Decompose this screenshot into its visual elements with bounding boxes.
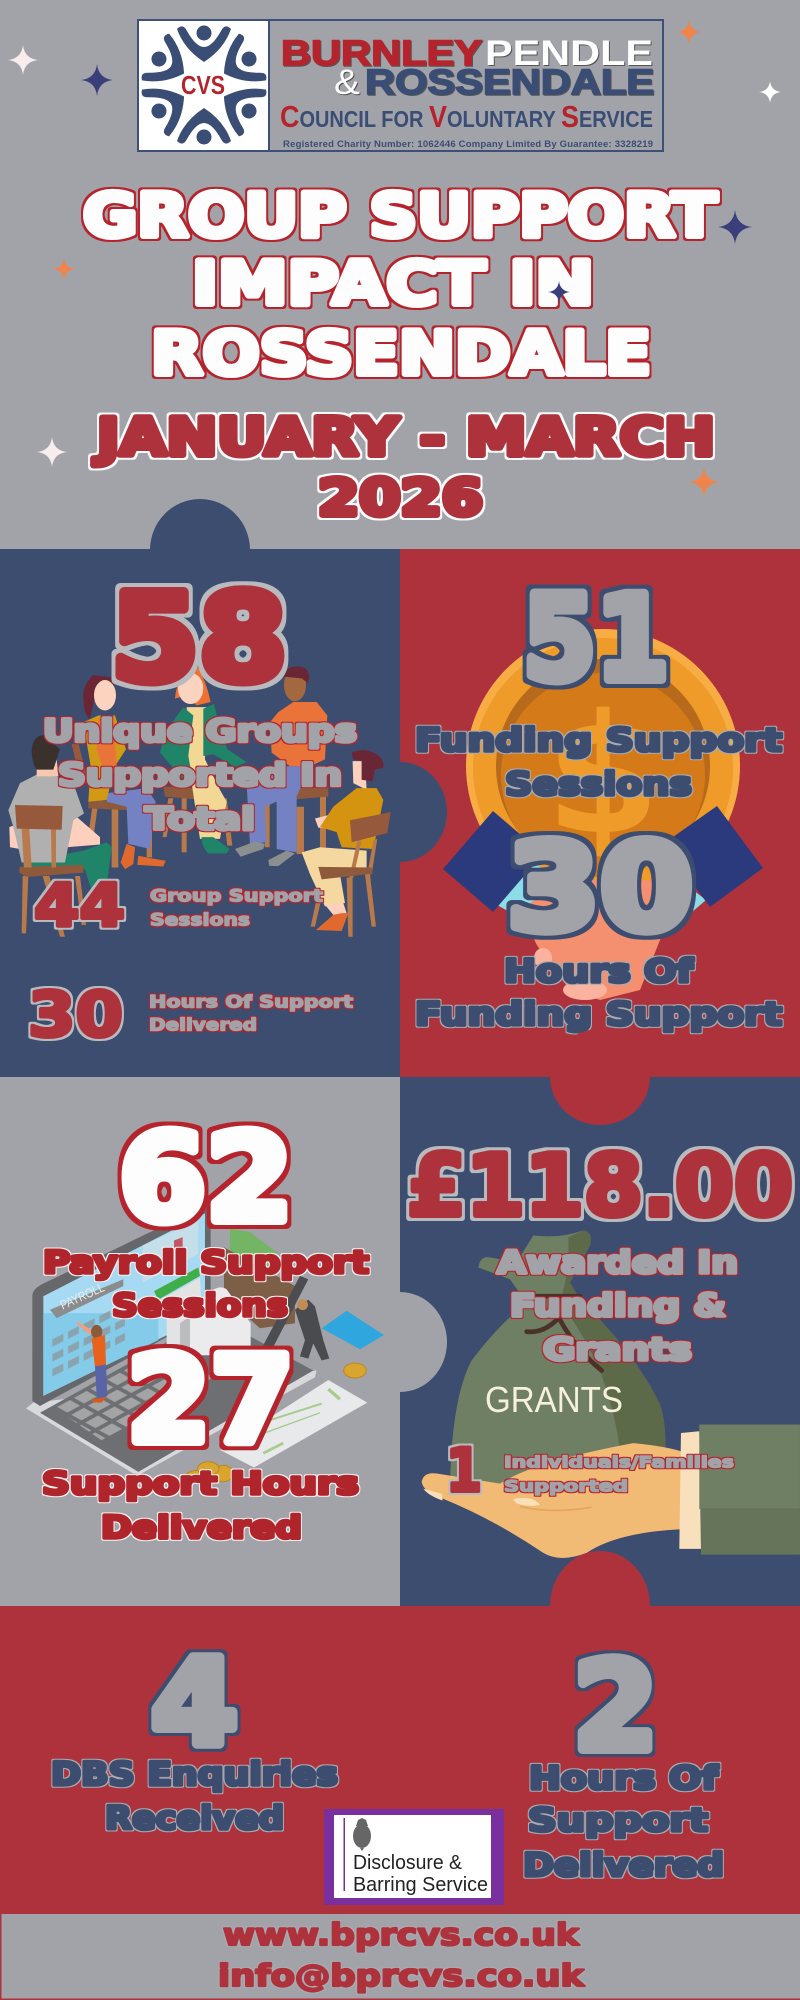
gold coins <box>187 1363 366 1482</box>
panel: group support <box>0 499 400 1077</box>
logo wordmark: BURNLEY <box>281 34 482 73</box>
label: unique groups supported in total <box>43 714 357 838</box>
panel background navy <box>0 549 400 1077</box>
stat: 1 individuals families supported: Individuals/Families <box>504 1452 734 1472</box>
puzzle tab top <box>150 499 250 601</box>
date heading: JANUARY - MARCH <box>94 408 715 468</box>
website address: www.bprcvs.co.uk <box>223 1918 580 1953</box>
logo frame <box>138 20 663 151</box>
laptop keys <box>52 1350 213 1441</box>
stat: 1 individuals families supported: Supported <box>504 1476 628 1496</box>
panel: funding and grants awarded <box>400 1029 800 1606</box>
label: awarded in funding and grants: Awarded In <box>497 1245 738 1281</box>
big number 30: 30 <box>507 819 693 958</box>
stat: 1 individuals families supported: 1 <box>446 1436 482 1506</box>
big number 62: 62 <box>119 1110 293 1249</box>
label: funding support sessions: Sessions <box>505 765 692 803</box>
stat: 44 group support sessions: Group Support <box>150 886 323 906</box>
Disclosure and Barring Service logo: Disclosure & <box>353 1852 463 1874</box>
label: hours of support delivered: Support <box>528 1801 708 1839</box>
footer contact strip <box>0 1913 800 2000</box>
jacket sleeve <box>699 1425 800 1555</box>
cheque <box>220 1380 367 1467</box>
icon: gold coin: $ <box>546 679 660 871</box>
big number 58: 58 <box>111 570 287 709</box>
person: man from behind in grey shirt <box>8 735 112 937</box>
label: DBS enquiries received: Received <box>105 1799 284 1837</box>
label: hours of funding support <box>415 952 782 1033</box>
label: DBS enquiries received: DBS Enquiries <box>51 1755 338 1793</box>
label: awarded in funding and grants: Grants <box>543 1332 692 1368</box>
logo wordmark: & <box>334 63 360 102</box>
label: unique groups supported in total: Total <box>145 802 255 838</box>
amount: £118.00: £118.00 <box>407 1137 793 1236</box>
date heading <box>94 408 715 527</box>
logo wordmark: COUNCIL FOR VOLUNTARY SERVICE <box>280 99 653 134</box>
label: support hours delivered: Delivered <box>101 1510 302 1546</box>
icon: gold coin <box>466 629 740 903</box>
main title <box>83 181 717 389</box>
icon: shaking hands <box>443 806 763 1000</box>
panel: funding support <box>400 549 800 1077</box>
panel background red <box>0 1606 800 1913</box>
logo white square with people emblem <box>139 20 269 151</box>
panel background red <box>400 549 800 1077</box>
puzzle tab from group panel <box>400 762 447 862</box>
stat: 30 hours of support delivered <box>28 978 353 1051</box>
receipts, binder and wallet <box>154 1229 295 1355</box>
decorative sparkle stars <box>8 20 781 497</box>
credit card <box>322 1311 384 1349</box>
person: man with orange hoodie <box>235 666 328 866</box>
label: DBS enquiries received <box>51 1755 338 1837</box>
big number 27: 27 <box>127 1332 294 1470</box>
stat: 44 group support sessions <box>34 871 323 940</box>
label: hours of funding support: Hours Of <box>504 952 694 990</box>
person: woman with mustard cardigan <box>72 675 166 869</box>
laptop base plate and deck <box>26 1316 317 1474</box>
email address: info@bprcvs.co.uk <box>218 1959 585 1994</box>
label: funding support sessions <box>415 721 782 803</box>
stat: 44 group support sessions: 44 <box>34 871 125 940</box>
stat: 44 group support sessions: Sessions <box>150 910 250 930</box>
Disclosure and Barring Service logo <box>324 1809 504 1905</box>
logo wordmark <box>280 34 654 150</box>
person: woman from behind in yellow sweater <box>302 750 391 937</box>
illustration: people seated in a circle <box>8 665 391 937</box>
laptop screen <box>32 1205 211 1406</box>
small businessman pushing lever <box>263 1276 329 1360</box>
puzzle tab into grants panel <box>550 1551 650 1661</box>
puzzle tab from payroll panel <box>400 1292 447 1392</box>
label: awarded in funding and grants: Funding & <box>510 1288 726 1324</box>
label: support hours delivered <box>42 1466 359 1546</box>
label: hours of support delivered: Hours Of <box>529 1759 719 1797</box>
panel background navy <box>400 1077 800 1606</box>
label: unique groups supported in total: Unique Groups <box>43 714 357 750</box>
person: woman with green jacket <box>160 665 247 853</box>
stat: 30 hours of support delivered: 30 <box>28 978 123 1051</box>
stat: 30 hours of support delivered: Delivered <box>149 1016 257 1036</box>
label: support hours delivered: Support Hours <box>42 1466 359 1502</box>
main title: ROSSENDALE <box>151 319 651 389</box>
header logo <box>138 20 663 151</box>
logo wordmark: PENDLE <box>485 34 653 73</box>
shirt cuff <box>679 1431 701 1549</box>
logo wordmark: Registered Charity Number: 1062446 Company Limited By Guarantee: 3328219 <box>283 139 653 150</box>
main title: GROUP SUPPORT <box>83 181 717 251</box>
label: hours of support delivered <box>523 1759 724 1884</box>
puzzle tab from funding panel <box>550 1029 650 1125</box>
icon: money bag <box>450 1230 665 1499</box>
label: payroll support sessions: Sessions <box>112 1288 288 1324</box>
label: hours of support delivered: Delivered <box>523 1846 724 1884</box>
label: unique groups supported in total: Supported In <box>58 758 342 794</box>
small person pointing at screen <box>77 1322 107 1403</box>
laptop screen: PAYROLL <box>58 1279 107 1312</box>
panel: DBS enquiries <box>0 1551 800 1913</box>
bag label GRANTS: GRANTS <box>485 1379 623 1420</box>
Disclosure and Barring Service logo: Barring Service <box>353 1874 488 1896</box>
main title: IMPACT IN <box>192 249 594 319</box>
panel background grey <box>0 1077 400 1606</box>
stat: 30 hours of support delivered: Hours Of Support <box>149 992 353 1012</box>
illustration: grants bag on hand <box>422 1230 800 1558</box>
label: payroll support sessions: Payroll Support <box>43 1245 369 1281</box>
stat: 1 individuals families supported <box>446 1436 734 1506</box>
icon: royal crest <box>353 1818 371 1851</box>
hand holding the bag <box>422 1443 682 1558</box>
big number 51: 51 <box>523 570 669 707</box>
logo white square with people emblem: CVS <box>181 70 225 100</box>
panel: payroll support <box>0 1077 400 1606</box>
illustration: isometric laptop payroll <box>26 1205 384 1482</box>
label: hours of funding support: Funding Support <box>415 995 782 1033</box>
label: payroll support sessions <box>43 1245 369 1324</box>
label: funding support sessions: Funding Support <box>415 721 782 759</box>
label: awarded in funding and grants <box>497 1245 738 1368</box>
date heading: 2026 <box>318 469 483 527</box>
big number 4: 4 <box>151 1635 238 1773</box>
logo wordmark: ROSSENDALE <box>365 63 654 102</box>
illustration: coin and handshake <box>443 629 763 1000</box>
big number 2: 2 <box>573 1636 658 1778</box>
icon: navy stars over title <box>548 210 752 303</box>
